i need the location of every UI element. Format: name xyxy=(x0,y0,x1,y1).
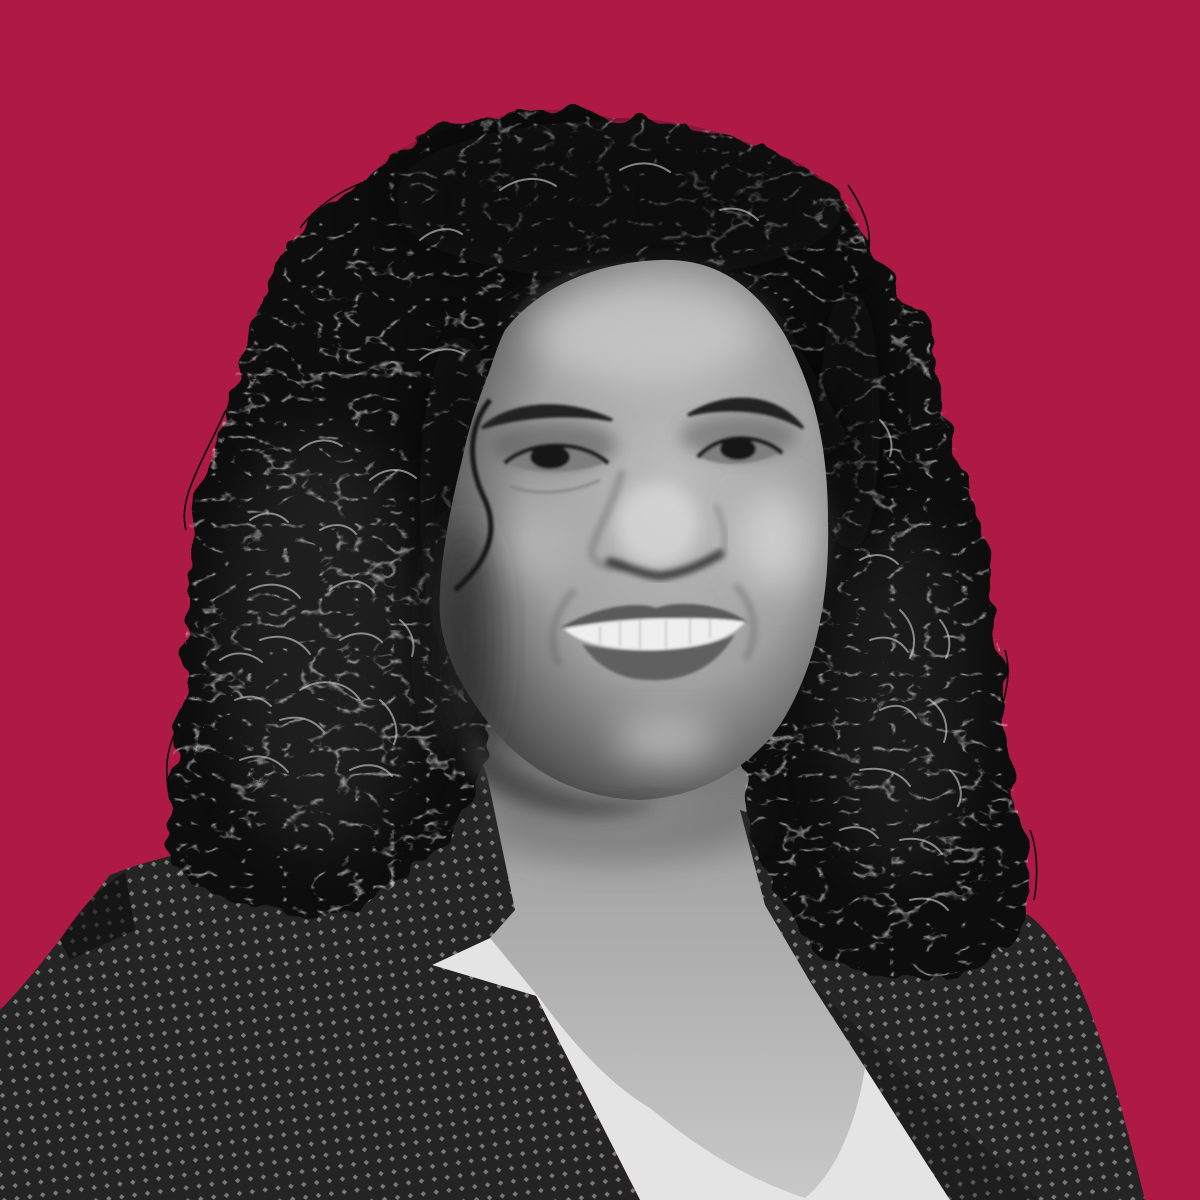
neck shadow xyxy=(490,795,752,861)
jacket xyxy=(0,720,1145,1200)
smile lines xyxy=(553,585,754,665)
right eyebrow xyxy=(688,399,803,428)
curl over face edge xyxy=(455,400,491,590)
left eye xyxy=(505,445,608,492)
white top xyxy=(432,938,960,1200)
neck and chest xyxy=(470,700,866,1198)
face xyxy=(435,260,828,817)
mouth xyxy=(560,604,748,680)
hair highlights xyxy=(160,100,1040,990)
right eye xyxy=(698,438,782,464)
left eyebrow xyxy=(482,406,612,428)
nose xyxy=(592,470,725,576)
hair xyxy=(160,100,1040,990)
